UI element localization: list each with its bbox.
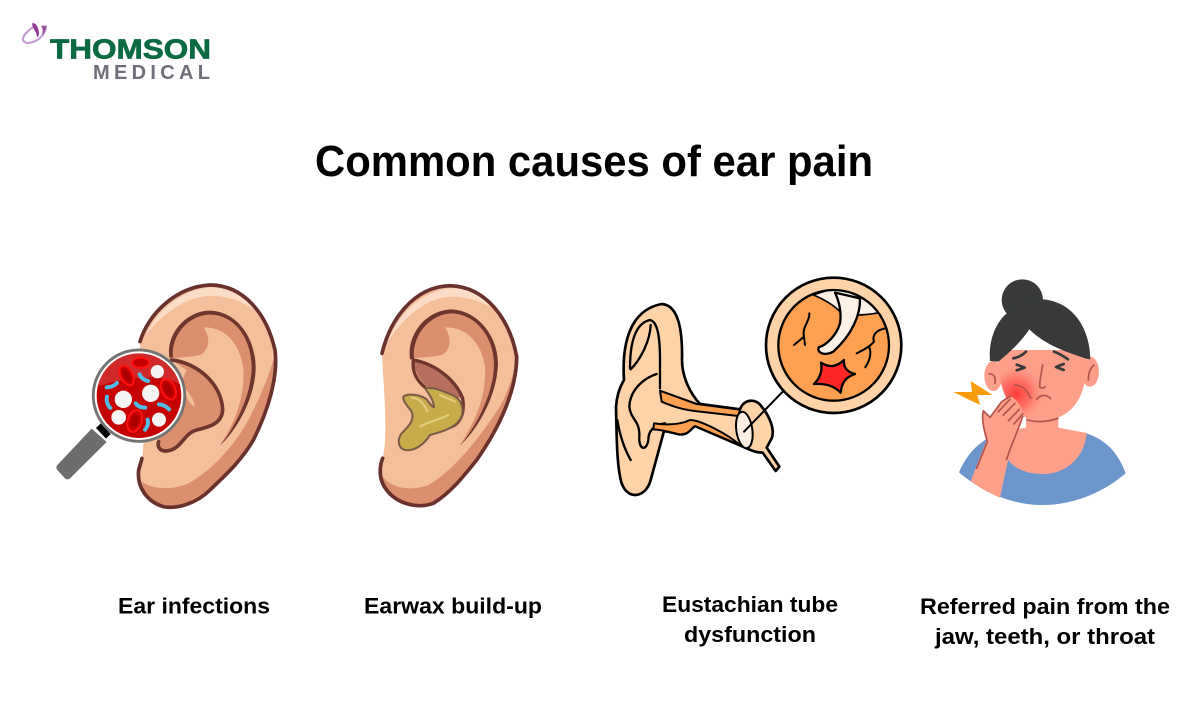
magnifier collar [96, 423, 111, 439]
ear rim highlight [146, 287, 255, 335]
ears [984, 361, 1002, 391]
face [998, 350, 1087, 421]
magnifier handle [56, 429, 107, 479]
title: Common causes of ear pain [315, 137, 873, 186]
logo [23, 23, 211, 84]
label: eustachian tube dysfunction: Eustachian tube [662, 592, 838, 617]
lens highlight [97, 353, 182, 387]
neck and chest [993, 413, 1087, 474]
logo wordmark: THOMSON: THOMSON [50, 34, 211, 64]
red perforation [814, 360, 855, 393]
malleus [818, 293, 860, 354]
white blood cells [111, 365, 166, 427]
logo icon: butterfly heart [23, 23, 46, 43]
eardrum [734, 411, 755, 449]
orange canal lower [653, 420, 740, 445]
orange canal upper [660, 391, 740, 416]
label: eustachian tube dysfunction: dysfunction [684, 622, 816, 647]
label: eustachian tube dysfunction [662, 592, 838, 647]
ear outer outline [138, 285, 276, 507]
label: earwax build-up: Earwax build-up [364, 594, 542, 618]
lens contents [97, 353, 182, 434]
brows and eyes [1013, 352, 1068, 370]
lightning bolt [953, 381, 993, 405]
icon: eustachian tube diagram [616, 278, 901, 495]
earwax highlights [412, 395, 455, 427]
zoom circle [766, 278, 901, 413]
ear inner shade [410, 311, 496, 445]
ear helix line [169, 311, 256, 446]
ear rim highlight [387, 288, 497, 343]
icon: ear with earwax build-up [380, 286, 517, 506]
ear outer outline [380, 286, 517, 506]
bacteria [107, 374, 169, 430]
label: referred pain [920, 594, 1170, 649]
icon: woman with referred jaw pain [953, 279, 1126, 505]
ear helix line [410, 309, 498, 446]
nose and mouth [1015, 365, 1058, 422]
label: referred pain: Referred pain from the [920, 594, 1170, 619]
ear outer shade [142, 360, 274, 507]
concha shade [158, 360, 222, 451]
hair [990, 299, 1090, 362]
label: ear infections: Ear infections [118, 594, 270, 618]
pain glow [1000, 370, 1040, 417]
ear body [138, 285, 276, 507]
red blood cells [116, 358, 179, 434]
ear concha line [158, 360, 223, 451]
shirt [959, 433, 1126, 505]
hand and arm [971, 396, 1023, 498]
ear concha line [413, 360, 463, 427]
outer ear and canal [616, 304, 779, 495]
icon: ear with magnifier showing infection [56, 285, 276, 507]
magnifier rim [93, 350, 185, 441]
eardrum cracks [794, 313, 885, 367]
inner ear fold lines [617, 320, 665, 460]
ear inner shade [169, 312, 255, 445]
ear body [380, 286, 517, 506]
zoom circle pale top [813, 288, 879, 315]
pointer line [744, 392, 783, 432]
ear canal shade [413, 361, 462, 398]
logo wordmark: MEDICAL: MEDICAL [93, 62, 210, 84]
ear outer shade [382, 365, 515, 506]
hand lines [977, 396, 1023, 468]
hair bun [1002, 279, 1043, 321]
earwax [399, 388, 462, 450]
label: referred pain: jaw, teeth, or throat [934, 624, 1156, 649]
